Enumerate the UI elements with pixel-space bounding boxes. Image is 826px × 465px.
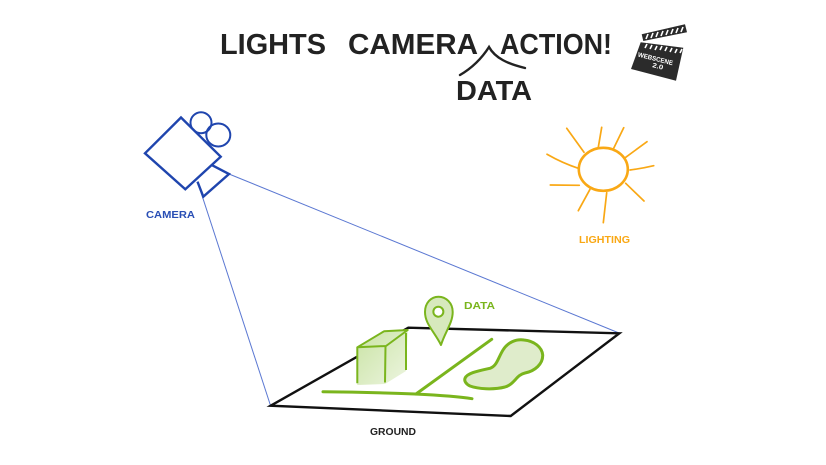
inserted word: data: DATA	[456, 75, 532, 106]
lighting label: LIGHTING	[579, 234, 630, 246]
icon: clapperboard: 2.0	[652, 62, 664, 72]
ground label: GROUND	[370, 426, 416, 438]
camera label: CAMERA	[146, 209, 195, 221]
title: ACTION!	[500, 29, 612, 61]
icon: clapperboard: WEBSCENE	[637, 52, 674, 67]
green park area	[465, 340, 543, 389]
icon: green building	[357, 330, 408, 385]
insertion caret	[460, 47, 525, 75]
camera view cone lines	[198, 174, 619, 406]
icon: sun	[547, 127, 654, 223]
green roads	[323, 339, 492, 399]
title	[220, 29, 612, 61]
data label: DATA	[464, 300, 495, 312]
icon: camera	[145, 112, 230, 197]
icon: clapperboard	[631, 24, 687, 81]
ground plane	[271, 328, 619, 416]
title: LIGHTS	[220, 29, 326, 61]
title: CAMERA	[348, 29, 478, 61]
icon: map pin	[425, 297, 453, 345]
